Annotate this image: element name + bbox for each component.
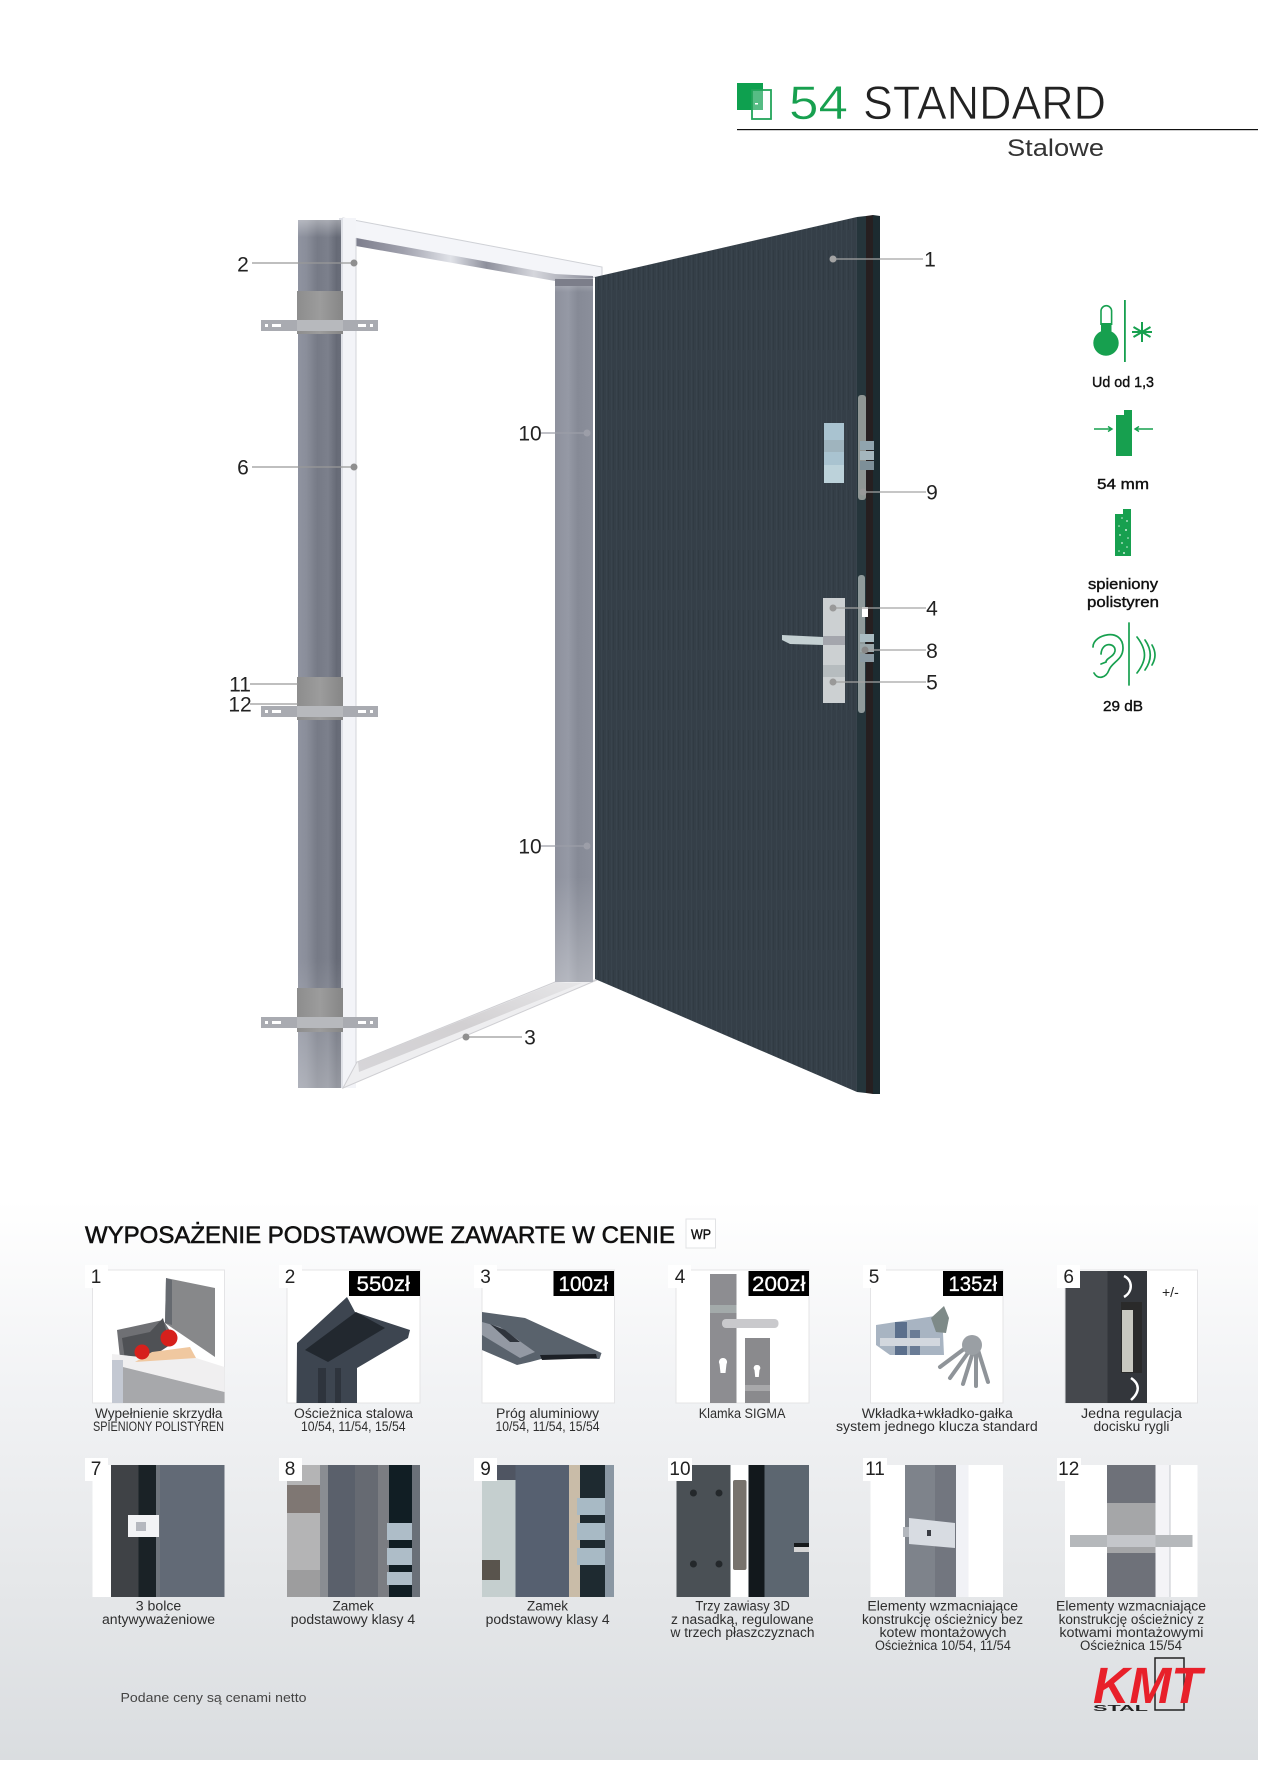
item 11 caption bbox=[862, 1599, 1023, 1653]
callout 8 bbox=[862, 640, 938, 663]
item 7 caption bbox=[102, 1599, 215, 1627]
item 10 number: 10 bbox=[669, 1459, 691, 1480]
callout 10 lower bbox=[518, 836, 590, 858]
callouts: part numbers bbox=[228, 248, 938, 1050]
subtitle: Stalowe bbox=[1007, 135, 1104, 162]
callout 11 bbox=[229, 674, 298, 696]
item 4: handle SIGMA bbox=[676, 1270, 809, 1403]
title rule bbox=[737, 129, 1258, 130]
item 2 caption bbox=[294, 1406, 413, 1434]
item 8 caption bbox=[291, 1599, 416, 1627]
item 9 number bbox=[474, 1458, 497, 1481]
spec label: foam bbox=[1087, 576, 1159, 611]
item 3 caption bbox=[496, 1406, 600, 1434]
door leaf bbox=[595, 215, 880, 1094]
item 11 caption: Ościeżnica 10/54, 11/54 bbox=[875, 1638, 1011, 1653]
item 7 caption: 3 bolce bbox=[136, 1599, 181, 1614]
frame: right jamb bbox=[555, 278, 593, 982]
badge: WP: WP bbox=[691, 1226, 711, 1242]
spec label: foam: spieniony bbox=[1088, 576, 1159, 593]
frame: left jamb bbox=[298, 218, 356, 1088]
item 11: reinforcement without anchors bbox=[870, 1465, 1003, 1597]
item 3 price: 100zł bbox=[558, 1273, 608, 1296]
brackets bbox=[261, 291, 378, 1032]
item 7 caption: antywyważeniowe bbox=[102, 1612, 215, 1627]
spec column bbox=[1087, 300, 1159, 715]
item 2 number bbox=[279, 1265, 302, 1288]
icon: foam bbox=[1115, 509, 1131, 556]
item 3 caption: 10/54, 11/54, 15/54 bbox=[496, 1419, 600, 1434]
item 10 caption: Trzy zawiasy 3D bbox=[695, 1599, 790, 1614]
item 8 number bbox=[279, 1458, 302, 1481]
item 12 caption: kotwami montażowymi bbox=[1059, 1625, 1203, 1640]
item 12 caption bbox=[1056, 1599, 1206, 1653]
item 9 caption: Zamek bbox=[527, 1599, 568, 1614]
item 7: anti-burglary bolts bbox=[92, 1465, 224, 1597]
callout 9: 9 bbox=[926, 482, 938, 504]
callout 5: 5 bbox=[926, 672, 938, 694]
callout 6: 6 bbox=[237, 456, 249, 480]
item 5: cylinder and keys bbox=[870, 1270, 1003, 1403]
icon: thickness bbox=[1094, 410, 1153, 456]
item 5 number bbox=[863, 1265, 886, 1288]
item 8 number: 8 bbox=[285, 1459, 295, 1480]
item 1 caption: Wypełnienie skrzydła bbox=[95, 1406, 223, 1421]
item 3 number bbox=[474, 1265, 497, 1288]
frame: top rail bbox=[343, 218, 602, 281]
item 11 number: 11 bbox=[865, 1459, 885, 1480]
item 12: reinforcement with anchors bbox=[1065, 1465, 1198, 1597]
callout 12 bbox=[228, 694, 298, 716]
item 10: 3D hinges bbox=[676, 1465, 809, 1597]
callout 4 bbox=[830, 598, 938, 620]
item 4 caption: Klamka SIGMA bbox=[699, 1406, 786, 1421]
item 6: latch adjustment bbox=[1065, 1270, 1198, 1403]
spec label: thickness: 54 mm bbox=[1097, 476, 1149, 493]
item 3 caption: Próg aluminiowy bbox=[496, 1406, 599, 1421]
icon: door bbox=[737, 83, 771, 119]
callout 10 lower: 10 bbox=[518, 836, 542, 858]
item 10 caption bbox=[669, 1599, 814, 1640]
item 6 number bbox=[1057, 1265, 1080, 1288]
icon: thermometer and snowflake bbox=[1093, 300, 1152, 362]
callout 6 bbox=[237, 456, 358, 480]
item 2 caption: Ościeżnica stalowa bbox=[294, 1406, 413, 1421]
title name: STANDARD bbox=[863, 76, 1106, 129]
spec label: Ud: Ud od 1,3 bbox=[1092, 374, 1154, 391]
item 2: steel frame bbox=[287, 1270, 420, 1403]
item 1 number bbox=[85, 1265, 108, 1288]
item 3: aluminium threshold bbox=[482, 1270, 614, 1403]
callout 3 bbox=[462, 1026, 536, 1050]
item 12 caption: Elementy wzmacniające bbox=[1056, 1599, 1206, 1614]
item 2 caption: 10/54, 11/54, 15/54 bbox=[301, 1419, 406, 1434]
callout 11: 11 bbox=[229, 674, 251, 696]
item 9: lock bbox=[482, 1465, 614, 1597]
item 2 price: 550zł bbox=[356, 1273, 410, 1296]
logo: KMT STAL: STAL bbox=[1093, 1704, 1148, 1713]
callout 2 bbox=[237, 254, 358, 276]
door hardware bbox=[782, 395, 874, 713]
item 1 caption bbox=[93, 1406, 224, 1434]
item 5 caption: Wkładka+wkładko-gałka bbox=[862, 1406, 1013, 1421]
header: product title bbox=[737, 76, 1258, 162]
item 7 number bbox=[85, 1458, 108, 1481]
callout 2: 2 bbox=[237, 254, 249, 276]
item 9 number: 9 bbox=[480, 1459, 491, 1480]
item 12 caption: konstrukcję ościeżnicy z bbox=[1059, 1612, 1204, 1627]
item 8 caption: Zamek bbox=[332, 1599, 374, 1614]
item 12 number: 12 bbox=[1058, 1459, 1079, 1480]
item 12 caption: Ościeżnica 15/54 bbox=[1080, 1638, 1182, 1653]
item 8 caption: podstawowy klasy 4 bbox=[291, 1612, 416, 1627]
spec label: foam: polistyren bbox=[1087, 594, 1159, 611]
item 2 number: 2 bbox=[285, 1267, 295, 1288]
callout 4: 4 bbox=[926, 598, 938, 620]
callout 9 bbox=[860, 482, 938, 504]
item 10 caption: z nasadką, regulowane bbox=[671, 1612, 814, 1627]
item 1 number: 1 bbox=[91, 1267, 101, 1288]
callout 10 upper bbox=[518, 422, 590, 446]
item 11 caption: kotew montażowych bbox=[880, 1625, 1006, 1640]
frame: threshold bbox=[343, 980, 597, 1088]
item 6 caption: docisku rygli bbox=[1094, 1419, 1170, 1434]
item 4 number bbox=[668, 1265, 691, 1288]
section heading: WYPOSAŻENIE PODSTAWOWE ZAWARTE W CENIE bbox=[85, 1222, 675, 1249]
item 9 caption bbox=[486, 1599, 610, 1627]
item 3 number: 3 bbox=[480, 1267, 491, 1288]
item 5 caption bbox=[836, 1406, 1038, 1434]
item 1: foam filling bbox=[92, 1270, 224, 1403]
callout 1 bbox=[830, 248, 936, 272]
item 10 caption: w trzech płaszczyznach bbox=[669, 1625, 814, 1640]
callout 5 bbox=[830, 672, 938, 694]
footnote: Podane ceny są cenami netto bbox=[120, 1690, 306, 1705]
item 6 number: 6 bbox=[1063, 1267, 1074, 1288]
item 4 price: 200zł bbox=[752, 1273, 806, 1296]
callout 1: 1 bbox=[924, 248, 936, 272]
item 11 caption: Elementy wzmacniające bbox=[867, 1599, 1018, 1614]
callout 10 upper: 10 bbox=[518, 422, 542, 446]
callout 3: 3 bbox=[524, 1026, 536, 1050]
item 4 number: 4 bbox=[675, 1267, 686, 1288]
item 7 number: 7 bbox=[91, 1459, 101, 1480]
callout 8: 8 bbox=[926, 640, 938, 663]
logo: KMT STAL: KMT bbox=[1093, 1657, 1206, 1714]
item 6 caption: Jedna regulacja bbox=[1081, 1406, 1183, 1421]
illustration: door and frame bbox=[261, 215, 880, 1094]
item 2 price bbox=[349, 1271, 420, 1296]
spec label: sound: 29 dB bbox=[1103, 698, 1143, 715]
badge: WP bbox=[686, 1219, 716, 1248]
callout 12: 12 bbox=[228, 694, 252, 716]
item 1 caption: SPIENIONY POLISTYREN bbox=[93, 1419, 224, 1434]
item 5 number: 5 bbox=[869, 1267, 879, 1288]
item 6: latch adjustment: +/- bbox=[1162, 1284, 1179, 1300]
item 5 price: 135zł bbox=[948, 1273, 997, 1296]
item 5 caption: system jednego klucza standard bbox=[836, 1419, 1038, 1434]
title number: 54 bbox=[789, 76, 848, 129]
item 9 caption: podstawowy klasy 4 bbox=[486, 1612, 610, 1627]
background panel: bottom gradient bbox=[0, 1200, 1258, 1760]
item 8: lock bbox=[287, 1465, 420, 1597]
item 6 caption bbox=[1081, 1406, 1183, 1434]
item 11 caption: konstrukcję ościeżnicy bez bbox=[862, 1612, 1023, 1627]
icon: ear and sound waves bbox=[1093, 623, 1155, 685]
